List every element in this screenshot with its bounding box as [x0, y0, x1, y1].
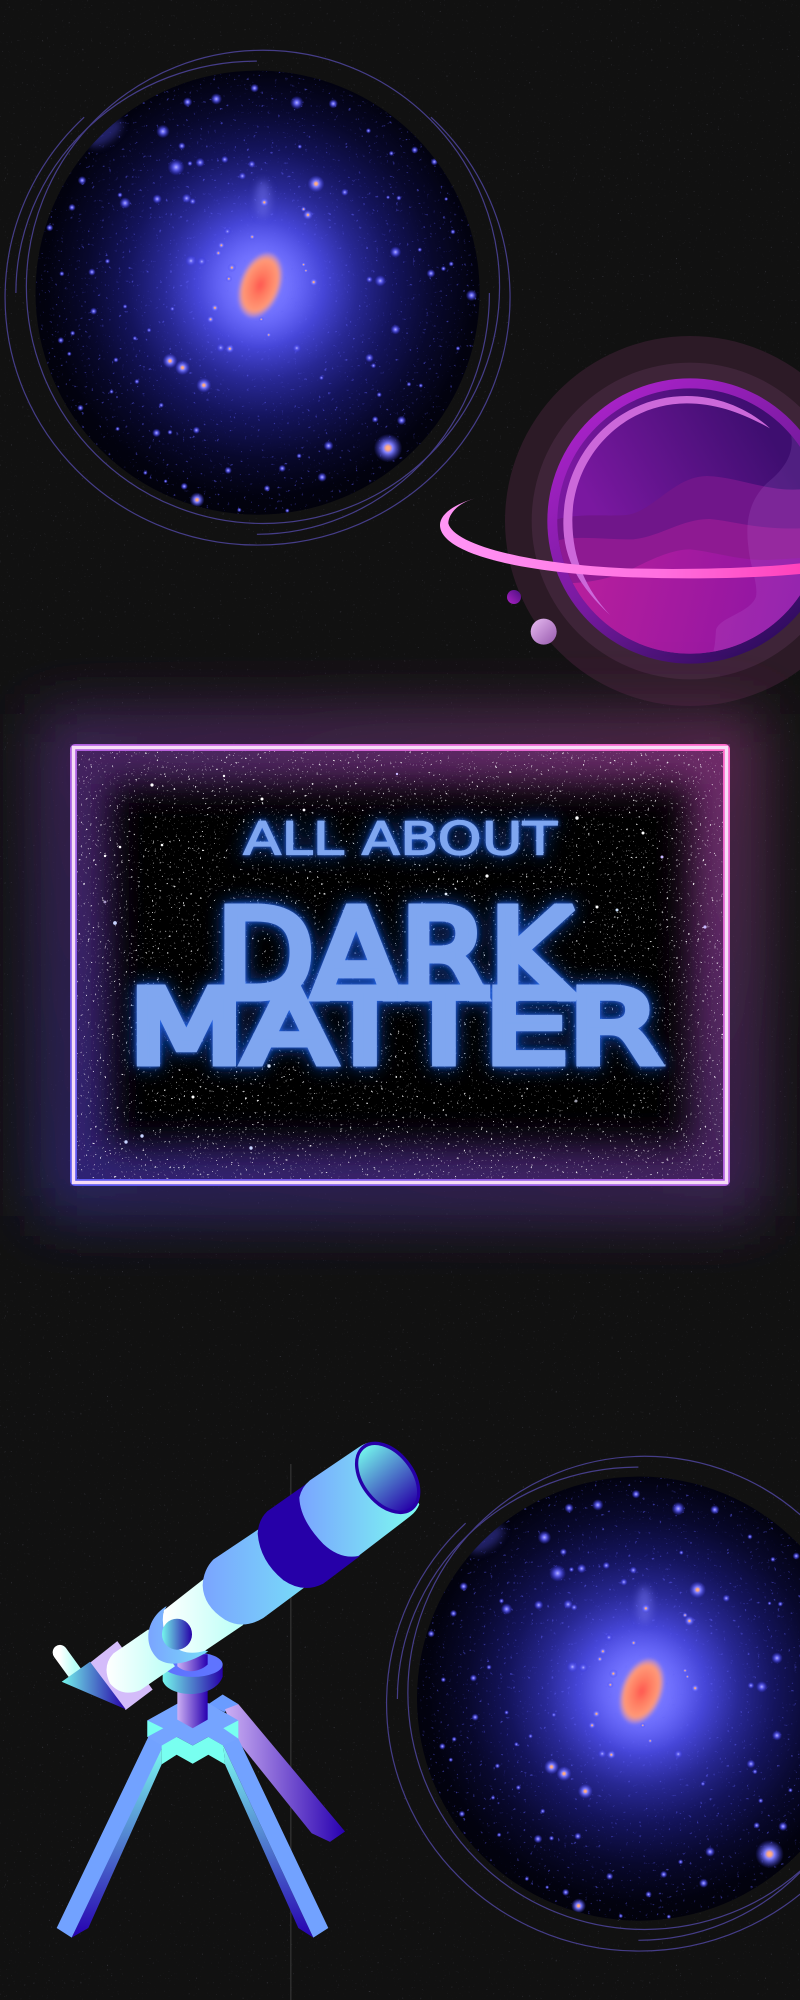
title: all about: ALL ABOUT — [243, 813, 557, 866]
planet highlight — [563, 396, 770, 615]
panel neon frame — [74, 748, 726, 1182]
galaxy disc — [34, 69, 482, 517]
small moon — [507, 590, 521, 604]
panel star field — [74, 748, 726, 1182]
telescope pillar — [177, 1689, 208, 1728]
telescope middle tube — [203, 1522, 305, 1625]
title: dark: DARK — [216, 884, 576, 1028]
telescope tripod base — [147, 1703, 238, 1745]
telescope rear leg — [208, 1694, 345, 1842]
telescope lavender plate — [90, 1641, 153, 1710]
title: matter: MATTER — [129, 968, 661, 1086]
telescope front white tube — [163, 1577, 243, 1653]
telescope eyepiece prism — [62, 1662, 126, 1709]
light moon — [531, 619, 557, 645]
telescope right leg — [208, 1737, 328, 1938]
title text — [129, 813, 661, 1086]
galaxy: bottom — [387, 1456, 800, 1951]
planet ring — [440, 498, 800, 578]
panel bright stars — [104, 773, 707, 1150]
planet halo — [505, 336, 800, 706]
vertical faint line — [290, 1464, 292, 2000]
panel outer glow — [70, 744, 730, 1186]
telescope collar — [163, 1652, 223, 1694]
telescope fork — [148, 1606, 208, 1664]
telescope dark band — [258, 1481, 360, 1588]
telescope eyepiece stub — [60, 1652, 75, 1673]
planet right overlay — [712, 427, 800, 660]
telescope rear white tube — [107, 1629, 175, 1693]
telescope left leg — [57, 1737, 177, 1938]
planet body — [553, 387, 800, 660]
title panel — [70, 744, 730, 1186]
telescope front tube — [299, 1442, 419, 1557]
planet — [440, 336, 800, 706]
telescope lens — [344, 1431, 431, 1525]
panel inner glow — [70, 744, 730, 1186]
telescope pivot — [162, 1619, 192, 1650]
orbit rings — [5, 50, 510, 545]
galaxy: top — [5, 50, 510, 545]
telescope — [57, 1431, 431, 1938]
telescope hub underside — [162, 1737, 225, 1764]
planet rim — [547, 378, 800, 664]
panel frame core — [74, 748, 726, 1182]
panel black field — [70, 744, 730, 1186]
